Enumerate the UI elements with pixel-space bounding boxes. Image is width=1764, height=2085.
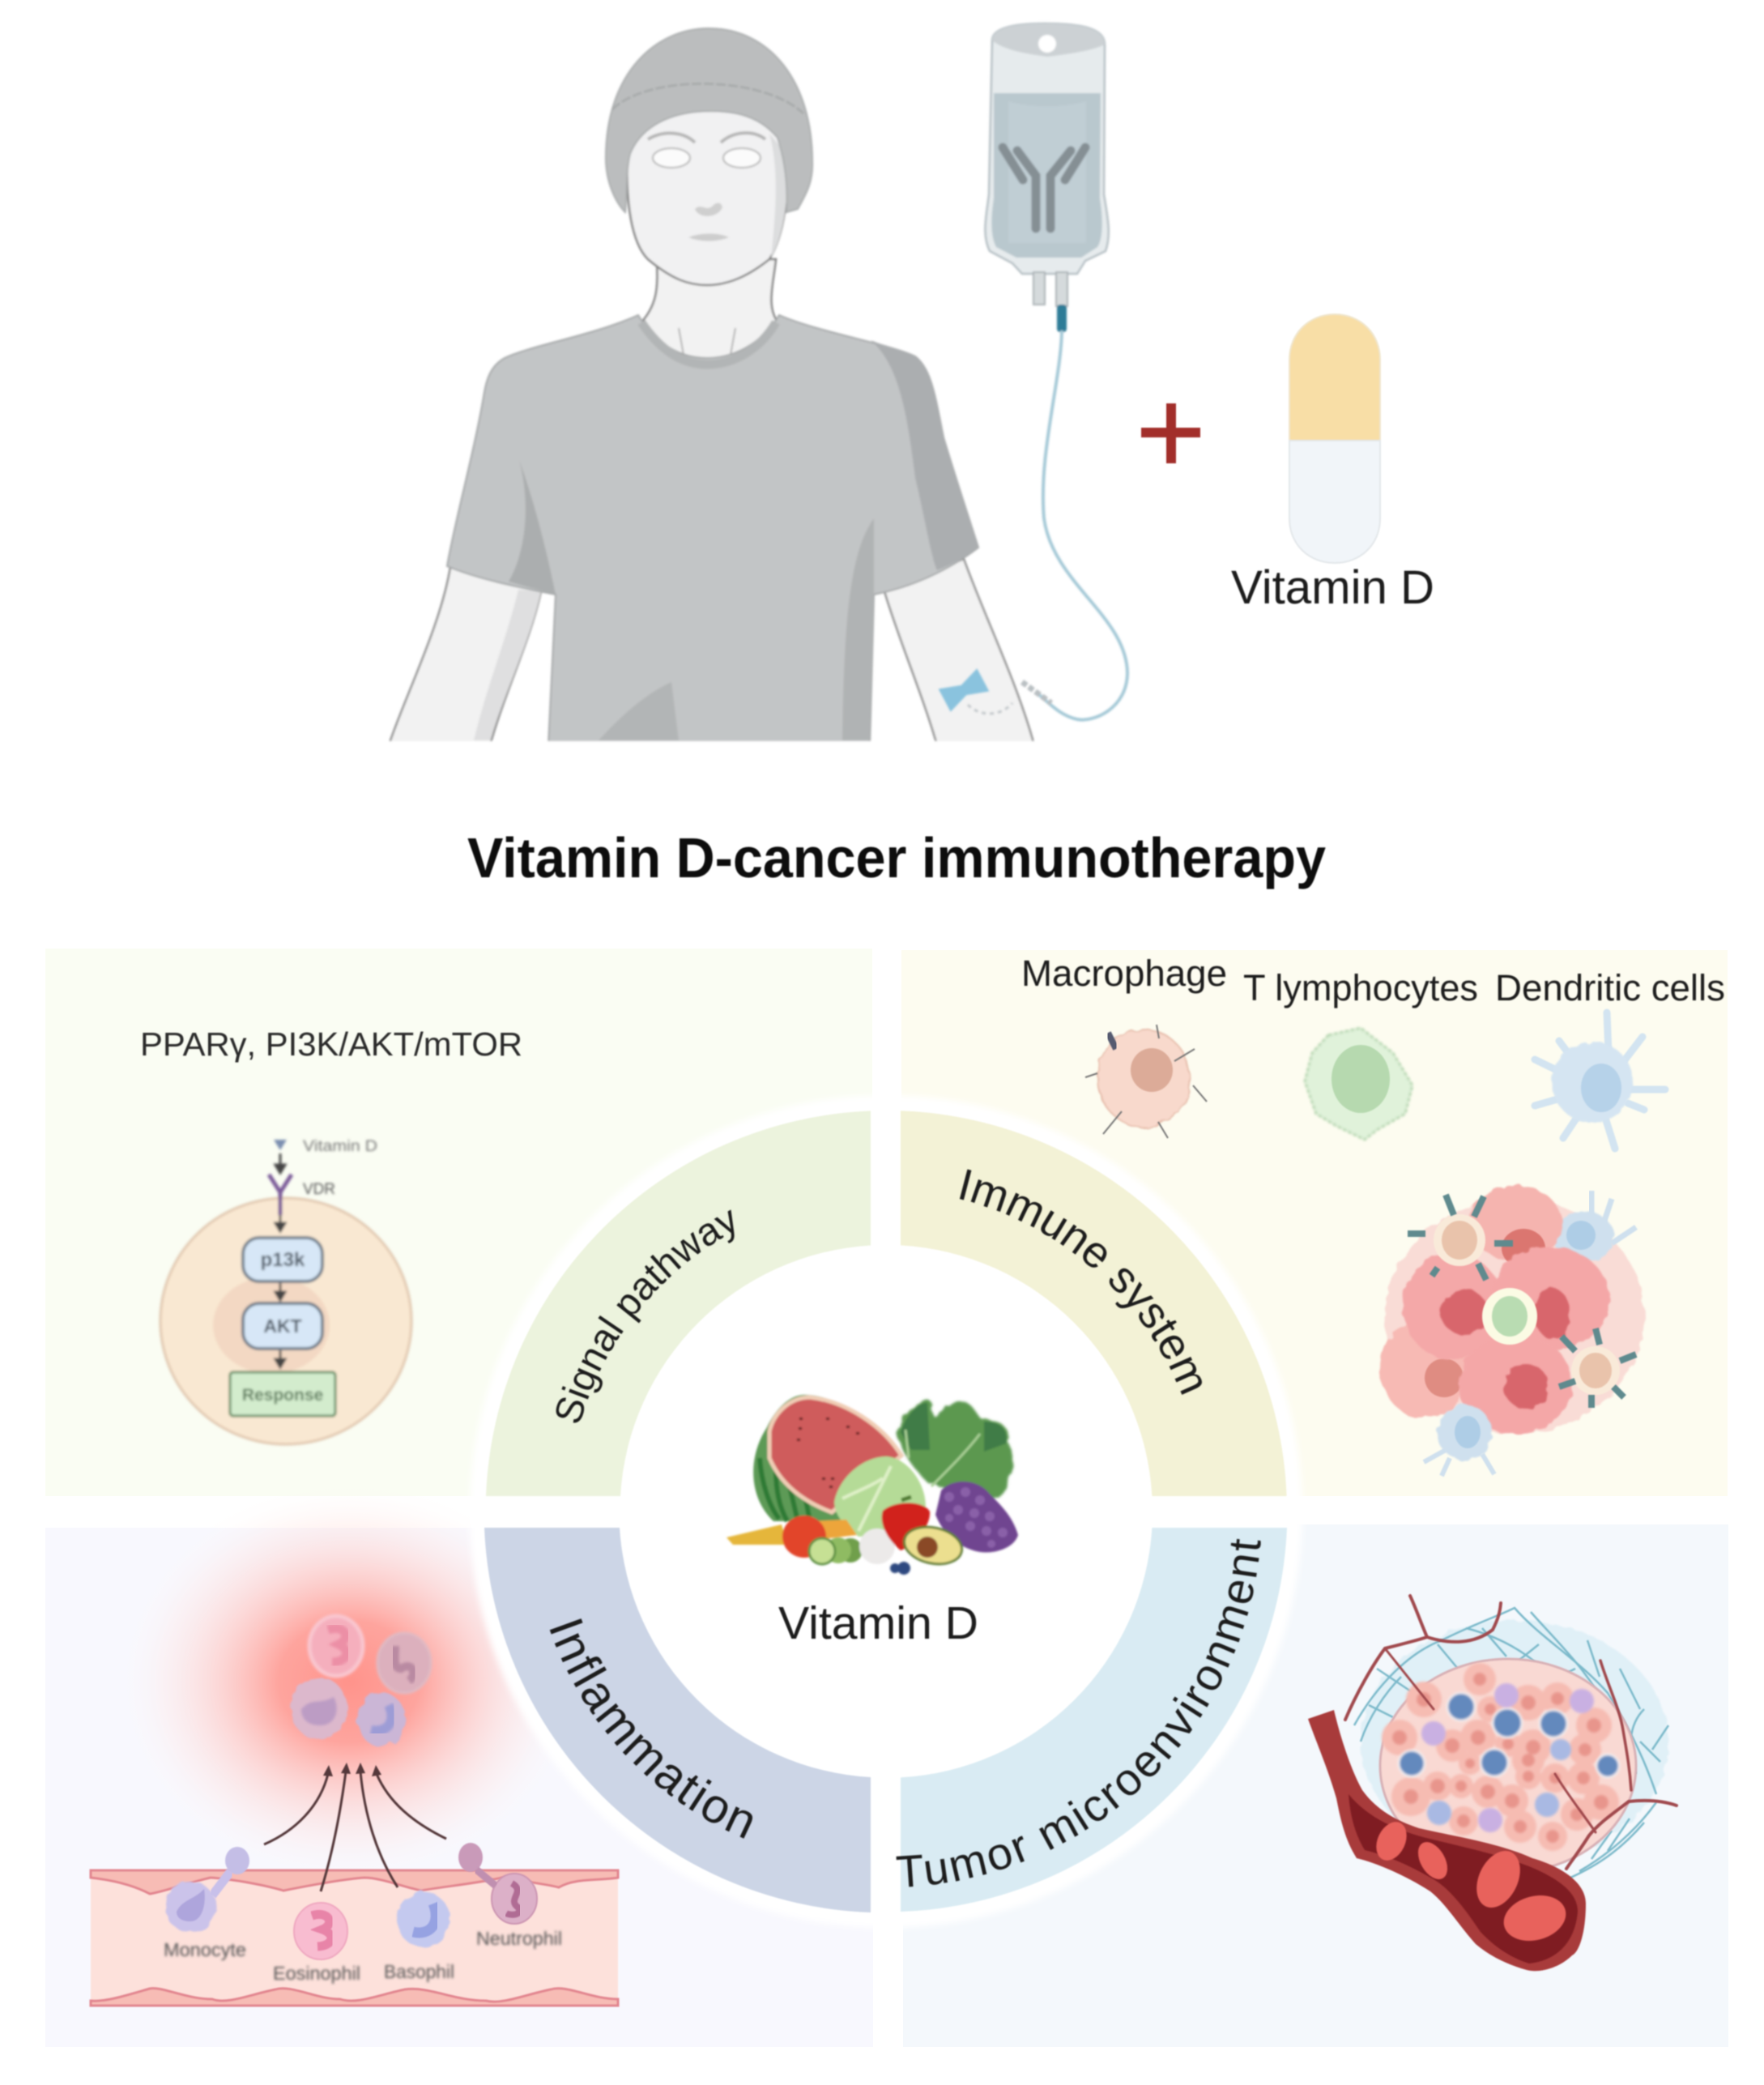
immune cells blue — [1399, 1693, 1619, 1777]
monocyte nucleus — [177, 1889, 205, 1921]
watermelon rind — [753, 1395, 901, 1521]
grapes — [935, 1482, 1018, 1552]
left arm — [389, 567, 541, 745]
blueberries — [890, 1562, 910, 1575]
watermelon seeds — [799, 1418, 858, 1488]
tumor cell large right — [1489, 1247, 1609, 1350]
bag port right — [1056, 272, 1067, 306]
illustration: blood vessel with leukocytes — [91, 1843, 618, 2006]
green nucleus — [1492, 1296, 1528, 1337]
right arm — [884, 559, 1034, 745]
arrows: leukocyte migration — [264, 1763, 446, 1891]
response box — [230, 1372, 335, 1416]
red blood cell 4 — [1498, 1889, 1571, 1947]
panel content: pathway label: PPARγ, PI3K/AKT/mTOR — [140, 1025, 522, 1063]
macrophage receptors — [1085, 1025, 1207, 1138]
collar — [641, 322, 776, 365]
vitamin D triangle — [274, 1140, 287, 1150]
neutrophil neck — [476, 1870, 496, 1886]
label: T lymphocytes: T lymphocytes — [1243, 967, 1478, 1008]
label: eosinophil: Eosinophil — [273, 1963, 360, 1984]
icon: T lymphocyte cell — [1305, 1028, 1412, 1140]
beanie fold — [612, 83, 803, 113]
top blue cell — [1553, 1211, 1614, 1263]
label: inflammation: Inflammation — [549, 1618, 753, 1839]
p13k box — [243, 1238, 322, 1281]
cucumber slice front — [809, 1538, 835, 1564]
kale leaves — [897, 1400, 1012, 1500]
monocyte neck — [212, 1871, 231, 1895]
tumor cell left lower — [1380, 1318, 1469, 1418]
eyebrows — [648, 133, 765, 143]
orange carrot — [810, 1520, 857, 1539]
watermelon flesh — [769, 1397, 901, 1512]
garlic — [859, 1529, 895, 1564]
AKT label: AKT — [263, 1315, 302, 1337]
label: monocyte: Monocyte — [164, 1939, 246, 1960]
stroma glow — [1361, 1620, 1668, 1863]
face — [627, 99, 787, 285]
needle tube loop — [968, 703, 1012, 714]
nose — [695, 203, 722, 216]
label: immune system: Immune system — [959, 1168, 1203, 1396]
vessel lumen — [91, 1873, 618, 2002]
vitamin D small label: Vitamin D — [303, 1138, 377, 1155]
icon: vitamin D capsule — [1289, 314, 1380, 563]
lower blue nucleus — [1455, 1416, 1481, 1448]
hanger hole — [1038, 35, 1056, 53]
illustration: tumor cluster with immune cells — [1380, 1186, 1644, 1476]
antibody — [1003, 147, 1085, 228]
panel: inflammation background — [45, 1528, 873, 2047]
bag body — [985, 23, 1109, 274]
T cell body — [1305, 1028, 1412, 1140]
checkpoint antibodies — [1408, 1195, 1636, 1408]
top blue cell nucleus — [1566, 1221, 1596, 1250]
tumor nucleus right — [1535, 1289, 1570, 1339]
right eye — [723, 148, 761, 168]
bag port left — [1033, 272, 1045, 305]
nucleus — [213, 1277, 330, 1374]
tumor cells — [1382, 1663, 1619, 1851]
title: Vitamin D-cancer immunotherapy — [467, 826, 1326, 889]
cucumber slices — [838, 1538, 863, 1563]
macrophage bound antibody — [1108, 1033, 1116, 1049]
icon: dendritic cell — [1535, 1013, 1665, 1149]
dendrites — [1535, 1013, 1665, 1149]
needle connector — [1022, 682, 1051, 703]
face shadow — [769, 134, 787, 258]
vessel bottom wall — [91, 1989, 618, 2006]
shirt — [447, 315, 978, 745]
AKT box — [243, 1303, 322, 1349]
icon: macrophage cell — [1085, 1025, 1207, 1138]
kale rib — [905, 1430, 980, 1486]
eosinophil nucleus — [328, 1628, 347, 1662]
carrot — [726, 1524, 787, 1545]
vessel lumen — [1349, 1794, 1578, 1963]
neck tendons — [679, 328, 735, 355]
image crop edge — [373, 741, 1053, 749]
liquid highlight — [1008, 101, 1086, 243]
pathway arrows — [275, 1153, 285, 1367]
tube connector — [1057, 305, 1067, 332]
diagram: vitamin D signalling cell — [160, 1138, 411, 1444]
response label: Response — [242, 1386, 323, 1405]
outer cell — [160, 1198, 411, 1444]
lower blue cell — [1437, 1405, 1492, 1460]
neutrophil extravasation — [458, 1843, 483, 1872]
panel: immune system background — [901, 950, 1728, 1496]
tumor cell large left — [1403, 1253, 1503, 1360]
avocado pit — [917, 1537, 938, 1558]
segment: immune system — [901, 1111, 1287, 1496]
neutrophil nucleus — [506, 1883, 519, 1915]
immune cells purple — [1421, 1683, 1594, 1832]
capsule bottom — [1289, 441, 1380, 563]
dendritic nucleus — [1581, 1064, 1621, 1112]
IV tube — [1037, 330, 1127, 720]
label: neutrophil: Neutrophil — [476, 1928, 562, 1949]
cucumber slice — [825, 1537, 851, 1563]
shirt shade: right underarm — [842, 518, 874, 740]
neutrophil nucleus — [395, 1646, 413, 1681]
eosinophil in vessel — [294, 1903, 347, 1959]
icon: IV bag with antibody — [939, 23, 1127, 720]
tan cell lower — [1571, 1346, 1620, 1395]
red blood cell 2 — [1412, 1837, 1453, 1884]
illustration: patient — [373, 28, 1053, 749]
lymphatic network — [1354, 1608, 1668, 1881]
panel: signal pathway background — [45, 949, 872, 1496]
label: basophil: Basophil — [384, 1961, 454, 1982]
lower blue dendrites — [1424, 1450, 1494, 1476]
kale dark edges — [901, 1403, 1007, 1452]
beanie — [606, 28, 812, 212]
pepper stem — [901, 1497, 911, 1500]
label: dendritic cells: Dendritic cells — [1495, 967, 1725, 1008]
neck — [640, 259, 779, 385]
segment: inflammation — [484, 1528, 871, 1912]
top blue cell dendrites — [1591, 1191, 1636, 1243]
blood vessel — [1308, 1710, 1586, 1971]
monocyte — [291, 1678, 347, 1739]
bag hanger tab — [992, 23, 1105, 57]
vessel top wall — [91, 1870, 618, 1894]
basophil nucleus — [413, 1904, 436, 1933]
basophil in vessel — [397, 1892, 450, 1947]
liquid — [991, 93, 1102, 258]
red capillaries — [1345, 1596, 1677, 1869]
left arm shade — [474, 590, 541, 740]
segment: tumor microenvironment — [901, 1528, 1287, 1912]
panel: tumor microenvironment background — [903, 1524, 1728, 2047]
red blood cell 3 — [1468, 1844, 1528, 1915]
VDR receptor — [269, 1175, 292, 1215]
neutrophil — [377, 1633, 431, 1693]
capsule label: Vitamin D — [1231, 561, 1434, 614]
T cell nucleus — [1332, 1045, 1390, 1113]
tan nucleus lower — [1579, 1353, 1612, 1388]
tumor nucleus lower — [1503, 1364, 1549, 1408]
macrophage nucleus — [1131, 1048, 1173, 1092]
inflammation glow — [114, 1479, 584, 1884]
neutrophil in vessel — [492, 1874, 537, 1924]
left eye — [653, 148, 690, 168]
tan nucleus top — [1442, 1221, 1477, 1260]
avocado — [901, 1522, 965, 1569]
watermelon stripes — [760, 1458, 810, 1521]
pale tumor backing — [1385, 1199, 1644, 1434]
tomato — [782, 1516, 826, 1558]
label: macrophage: Macrophage — [1021, 953, 1227, 994]
segment: signal pathway — [486, 1111, 871, 1496]
monocyte nucleus — [301, 1697, 337, 1725]
tumor nucleus left — [1441, 1290, 1488, 1335]
monocyte in vessel — [164, 1882, 216, 1932]
label: signal pathway: Signal pathway — [556, 1209, 735, 1424]
monocyte extravasation — [225, 1847, 249, 1874]
cabbage veins — [842, 1466, 891, 1531]
shirt shade: left underarm — [509, 460, 556, 595]
tumor cell top nucleus — [1502, 1229, 1545, 1268]
eosinophil — [309, 1616, 363, 1676]
cabbage — [834, 1456, 926, 1537]
ring backing — [470, 1095, 1302, 1928]
basophil nucleus — [371, 1705, 392, 1731]
tumor cell top — [1468, 1186, 1562, 1260]
red pepper — [882, 1503, 930, 1550]
tumor cell large lower — [1459, 1333, 1572, 1434]
illustration: tumor microenvironment — [1308, 1596, 1677, 1971]
icon: fruits and vegetables — [726, 1395, 1018, 1575]
p13k label: p13k — [261, 1249, 305, 1271]
mouth — [688, 233, 729, 241]
T cell in tumor (green) — [1482, 1288, 1537, 1345]
capsule top — [1289, 314, 1380, 441]
immune cells pale blue — [1427, 1739, 1571, 1825]
cells: inflamed tissue leukocytes — [291, 1616, 431, 1746]
macrophage body — [1097, 1030, 1190, 1127]
eosinophil nucleus — [312, 1914, 331, 1946]
tumor mass — [1380, 1659, 1636, 1873]
center label: vitamin D: Vitamin D — [778, 1597, 978, 1649]
butterfly needle — [939, 668, 989, 712]
tan cell top — [1434, 1214, 1485, 1266]
shirt shade: right sleeve — [871, 340, 978, 570]
VDR small label: VDR — [303, 1181, 335, 1198]
basophil — [357, 1693, 406, 1746]
label: tumor microenvironment: Tumor microenvironment — [896, 1537, 1262, 1887]
tumor cell left nucleus — [1425, 1358, 1464, 1397]
icon: plus sign — [1141, 403, 1200, 463]
grape highlights — [944, 1487, 1008, 1548]
red blood cell 1 — [1370, 1817, 1412, 1865]
shirt shade: lower fold — [599, 682, 679, 740]
dendritic body — [1552, 1042, 1633, 1123]
